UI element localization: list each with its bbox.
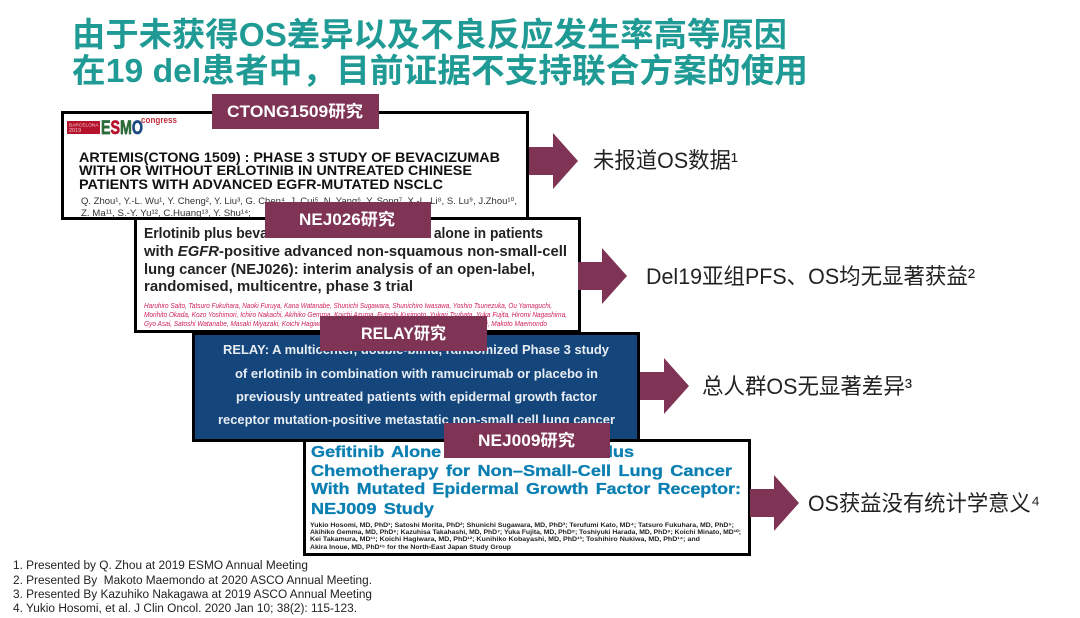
paper authors: Haruhiro Saito, Tatsuro Fukuhara, Naoki Furuya, Kana Watanabe, Shunichi Sugawara, Shunichiro Iwasawa, Yoshio Tsunezuka, Ou Yamaguchi,: [144, 301, 552, 310]
paper title: WITH OR WITHOUT ERLOTINIB IN UNTREATED CHINESE: [79, 162, 472, 178]
panel: ARTEMIS CTONG1509 paper: [62, 112, 528, 219]
label: CTONG1509: [212, 94, 379, 129]
paper title: With Mutated Epidermal Growth Factor Receptor:: [311, 481, 741, 498]
paper title: [218, 343, 615, 427]
paper title: Gefitinib Alone Versus Gefitinib Plus: [311, 444, 634, 461]
footnotes: 4. Yukio Hosomi, et al. J Clin Oncol. 2020 Jan 10; 38(2): 115-123.: [13, 603, 357, 615]
arrow 4: [750, 475, 799, 531]
label: NEJ026: [265, 202, 431, 238]
result 2: Del19亚组PFS、OS均无显著获益²: [646, 264, 975, 289]
result 4: OS获益没有统计学意义⁴: [808, 491, 1040, 516]
paper title: [79, 149, 500, 192]
arrow 3: [640, 358, 689, 414]
footnotes: [13, 560, 372, 615]
paper authors: Morihito Okada, Kozo Yoshimori, Ichiro Nakachi, Akihiko Gemma, Koichi Azuma, Futoshi Kurimoto, Yukari Tsubata, Yuka Fujita, Hiromi Nagashima,: [144, 310, 567, 319]
paper authors: Z. Ma¹¹, S.-Y. Yu¹², C.Huang¹³, Y. Shu¹⁴;: [81, 208, 251, 219]
panel: NEJ009 paper: [304, 440, 750, 554]
paper title: receptor mutation-positive metastatic non-small cell lung cancer: [218, 413, 615, 427]
icon: ESMO congress logo: [67, 115, 177, 139]
title: 在19 del患者中，目前证据不支持联合方案的使用: [72, 52, 808, 89]
paper authors: Yukio Hosomi, MD, PhD¹; Satoshi Morita, PhD²; Shunichi Sugawara, MD, PhD³; Terufumi Kato, MD⁴; Tatsuro Fukuhara, MD, PhD⁵;: [310, 522, 734, 529]
footnotes: 1. Presented by Q. Zhou at 2019 ESMO Annual Meeting: [13, 560, 308, 572]
result 3: 总人群OS无显著差异³: [702, 374, 912, 399]
paper authors: [81, 196, 517, 219]
label: NEJ009: NEJ009研究: [478, 430, 576, 450]
icon: ESMO congress logo: ESMO: [101, 118, 143, 139]
paper title: randomised, multicentre, phase 3 trial: [144, 278, 413, 295]
title: 由于未获得OS差异以及不良反应发生率高等原因: [72, 16, 787, 53]
label: RELAY: [320, 316, 487, 351]
label: NEJ026: NEJ026研究: [299, 209, 396, 229]
paper title: with EGFR-positive advanced non-squamous non-small-cell: [143, 243, 567, 260]
icon: ESMO congress logo: BARCELONA: [69, 122, 99, 128]
paper title: Chemotherapy for Non–Small-Cell Lung Cancer: [311, 463, 732, 480]
label: CTONG1509: CTONG1509研究: [227, 101, 364, 121]
icon: ESMO congress logo: 2019: [69, 128, 81, 134]
paper authors: Akira Inoue, MD, PhD¹⁵ for the North-East Japan Study Group: [310, 544, 511, 551]
paper title: NEJ009 Study: [311, 501, 434, 518]
label: NEJ009: [444, 423, 610, 458]
arrow 2: [578, 248, 627, 304]
paper authors: Q. Zhou¹, Y.-L. Wu¹, Y. Cheng², Y. Liu³, G. Chen⁴, J. Cui⁵, N. Yang⁶, Y. Song⁷, X.-L. Li⁸, S. Lu⁹, J.Zhou¹⁰,: [81, 196, 517, 207]
result 1: 未报道OS数据¹: [593, 148, 738, 173]
paper title: [143, 225, 567, 295]
footnotes: 2. Presented By Makoto Maemondo at 2020 ASCO Annual Meeting.: [13, 575, 372, 587]
paper authors: Gyo Asai, Satoshi Watanabe, Masaki Miyazaki, Koichi Hagiwara, Toshihiro Nukiwa, Satoshi Morita, Kunihiko Kobayashi, Makoto Maemondo: [144, 319, 547, 328]
paper title: [311, 444, 741, 518]
icon: ESMO congress logo: congress: [141, 115, 177, 125]
footnotes: 3. Presented By Kazuhiko Nakagawa at 2019 ASCO Annual Meeting: [13, 589, 372, 601]
paper authors: [144, 301, 567, 328]
arrow 1: [529, 133, 578, 189]
paper title: ARTEMIS(CTONG 1509) : PHASE 3 STUDY OF BEVACIZUMAB: [79, 149, 500, 165]
panel: RELAY paper: [194, 334, 638, 440]
paper title: RELAY: A multicenter, double-blind, randomized Phase 3 study: [223, 343, 609, 357]
title: [72, 16, 808, 89]
paper title: Erlotinib plus bevacizumab versus erlotinib alone in patients: [144, 225, 543, 242]
paper title: lung cancer (NEJ026): interim analysis of an open-label,: [144, 261, 535, 278]
panel: NEJ026 paper: [136, 218, 580, 332]
paper authors: Kei Takamura, MD¹¹; Koichi Hagiwara, MD, PhD¹²; Kunihiko Kobayashi, MD, PhD¹³; Toshihiro Nukiwa, MD, PhD¹⁴; and: [310, 536, 700, 543]
label: RELAY: RELAY研究: [361, 323, 446, 343]
paper title: of erlotinib in combination with ramucirumab or placebo in: [235, 367, 598, 381]
paper authors: Akihiko Gemma, MD, PhD⁶; Kazuhisa Takahashi, MD, PhD⁷; Yuka Fujita, MD, PhD⁸; Toshiyuki Harada, MD, PhD⁹; Koichi Minato, MD¹⁰;: [310, 529, 741, 536]
paper title: PATIENTS WITH ADVANCED EGFR-MUTATED NSCLC: [79, 176, 443, 192]
paper title: previously untreated patients with epidermal growth factor: [236, 390, 597, 404]
paper authors: [310, 522, 741, 551]
